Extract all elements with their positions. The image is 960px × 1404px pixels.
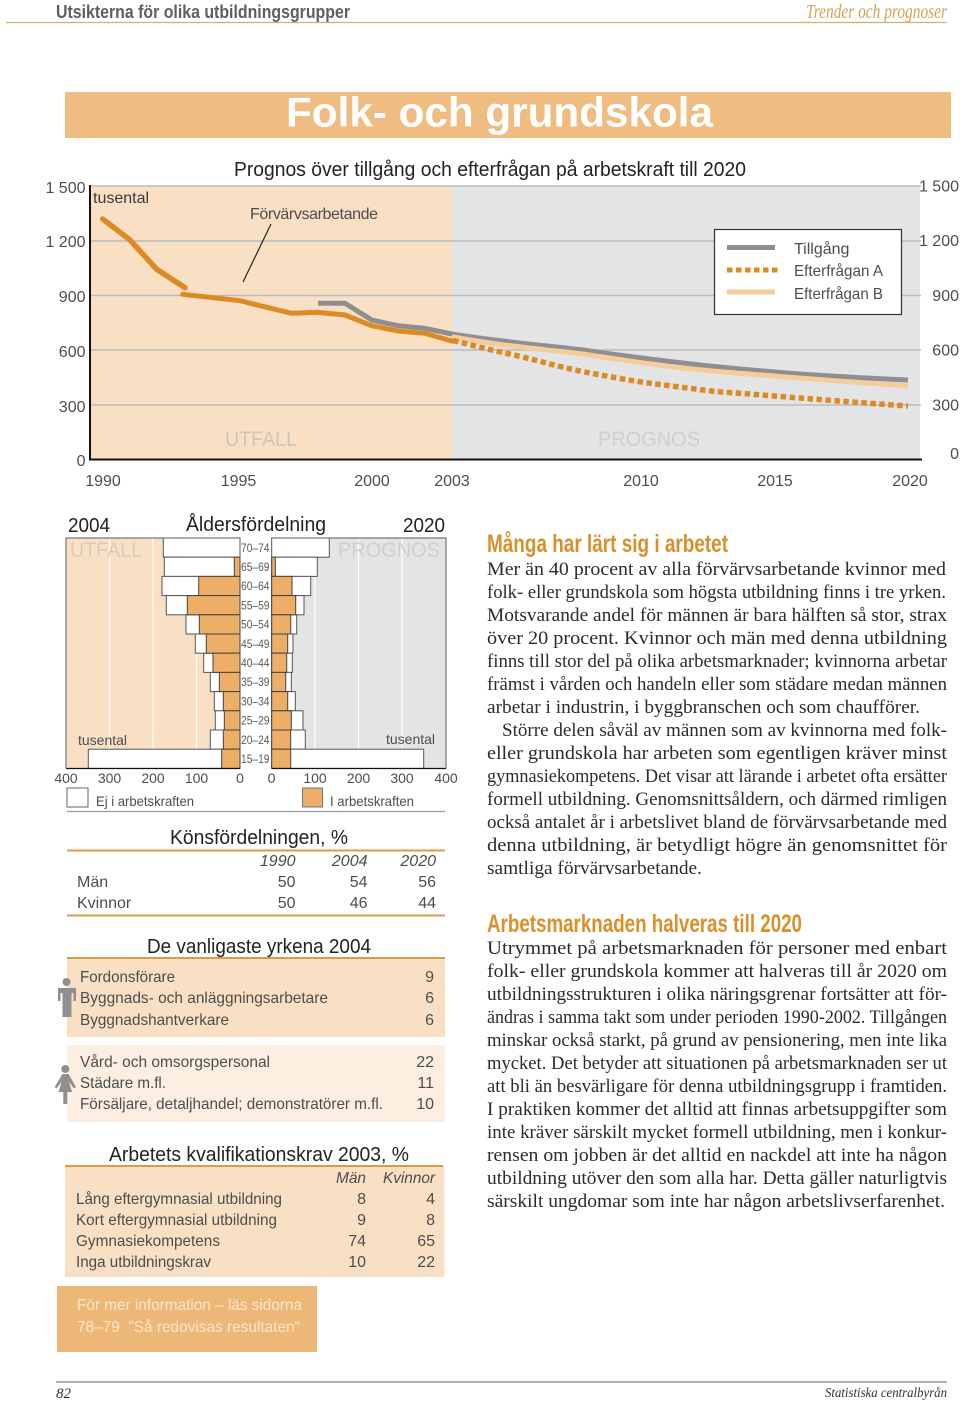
age group labels: 45–49 xyxy=(241,637,270,651)
pyramid axis labels: 0 xyxy=(268,770,276,786)
panel: women's occupations: Vård- och omsorgspersonal xyxy=(80,1053,270,1071)
table: arbetets kvalifikationskrav: 65 xyxy=(417,1233,435,1250)
text block: många har lärt sig i arbetet: arbetar i industrin, i byggbranschen och som chaufförer. xyxy=(487,697,920,718)
table: könsfördelningen: Kvinnor xyxy=(77,895,132,912)
table: arbetets kvalifikationskrav: 22 xyxy=(417,1254,435,1271)
text block: arbetsmarknaden halveras till 2020: folk- eller grundskola kommer att halveras till år 2020 om xyxy=(487,961,947,982)
left axis labels: 600 xyxy=(59,344,86,361)
panel: de vanligaste yrkena xyxy=(55,936,445,1122)
unit labels xyxy=(78,731,435,748)
table: arbetets kvalifikationskrav: 10 xyxy=(348,1254,366,1271)
panel: men's occupations: Fordonsförare xyxy=(80,969,175,986)
table: könsfördelningen: 2004 xyxy=(331,853,368,870)
x axis labels: 2003 xyxy=(434,473,470,490)
age group labels: 60–64 xyxy=(241,579,270,593)
right axis labels: 300 xyxy=(932,398,959,414)
table: könsfördelningen: Könsfördelningen, % xyxy=(170,827,348,849)
text block: arbetsmarknaden halveras till 2020: rensen om jobben är det alltid en nackdel att inte ha någon xyxy=(487,1145,948,1166)
panel: women's occupations: Försäljare, detaljhandel; demonstratörer m.fl. xyxy=(80,1096,383,1113)
x axis labels: 2000 xyxy=(354,473,390,490)
series: efterfrågan A xyxy=(453,340,908,406)
right axis labels: 600 xyxy=(932,342,959,360)
table: arbetets kvalifikationskrav: Lång eftergymnasial utbildning xyxy=(76,1190,282,1208)
period label prognos: PROGNOS xyxy=(598,427,700,451)
text block: många har lärt sig i arbetet xyxy=(487,530,948,879)
legend: Tillgång xyxy=(794,240,849,258)
left axis labels: 0 xyxy=(77,453,86,470)
x axis labels: 2015 xyxy=(757,473,793,490)
panel: prognos background xyxy=(452,186,920,459)
age group labels: 70–74 xyxy=(241,541,270,555)
left axis labels: 1 200 xyxy=(45,234,86,251)
pyramid legend: I arbetskraften xyxy=(330,793,414,809)
series label förvärvsarbetande xyxy=(243,206,378,282)
period labels: UTFALL xyxy=(70,538,142,562)
panel: men's occupations: 9 xyxy=(425,969,434,986)
legend xyxy=(714,230,902,314)
bars: in labour force 2004 xyxy=(187,557,240,768)
heading: Många har lärt sig i arbetet xyxy=(487,530,729,558)
title banner: Folk- och grundskola xyxy=(286,88,714,136)
x axis labels: 1990 xyxy=(85,473,121,490)
period labels xyxy=(70,538,440,562)
table: könsfördelningen: 50 xyxy=(278,874,296,891)
pyramid axis labels: 400 xyxy=(434,770,458,786)
pyramid headings xyxy=(68,513,445,537)
legend: Efterfrågan A xyxy=(794,262,883,280)
series: efterfrågan B xyxy=(452,337,908,386)
age group labels: 25–29 xyxy=(241,714,270,728)
table: könsfördelningen xyxy=(67,827,445,916)
table: arbetets kvalifikationskrav: Kort eftergymnasial utbildning xyxy=(76,1212,277,1229)
panel: men's occupations xyxy=(67,958,445,1037)
panel: women's occupations: 11 xyxy=(417,1075,434,1092)
icon: woman xyxy=(55,1065,76,1104)
text block: många har lärt sig i arbetet: Motsvarande andel för männen är bara hälften så stor, strax xyxy=(487,605,948,626)
pyramid headings: 2020 xyxy=(403,515,445,537)
pyramid axis labels: 300 xyxy=(98,770,121,786)
age group labels: 40–44 xyxy=(241,656,270,670)
table: arbetets kvalifikationskrav: Män xyxy=(336,1170,366,1187)
table: arbetets kvalifikationskrav: Arbetets kvalifikationskrav 2003, % xyxy=(109,1144,409,1166)
right axis labels: 0 xyxy=(950,446,959,463)
panel: men's occupations: Byggnads- och anläggningsarbetare xyxy=(80,990,328,1007)
unit labels: tusental xyxy=(386,731,435,747)
pyramid axis labels: 100 xyxy=(303,770,327,786)
unit labels: tusental xyxy=(78,732,127,748)
table: arbetets kvalifikationskrav: 74 xyxy=(348,1233,366,1250)
table: arbetets kvalifikationskrav: 4 xyxy=(426,1191,435,1208)
heading: Arbetsmarknaden halveras till 2020 xyxy=(487,910,802,938)
table: könsfördelningen: 50 xyxy=(278,895,296,912)
left axis labels: 300 xyxy=(59,399,86,416)
table: arbetets kvalifikationskrav: Inga utbildningskrav xyxy=(76,1254,211,1271)
text block: arbetsmarknaden halveras till 2020: att bli än besvärligare för denna utbildningsgrupp i framtiden. xyxy=(487,1076,947,1097)
table: arbetets kvalifikationskrav: 9 xyxy=(357,1212,366,1229)
callout: more information: För mer information – läs sidorna xyxy=(77,1297,302,1314)
page footer xyxy=(56,1382,947,1402)
text block: många har lärt sig i arbetet: samtliga förvärvsarbetande. xyxy=(487,858,702,879)
panel: men's occupations: 6 xyxy=(425,990,434,1007)
panel: 2004 background xyxy=(66,538,240,768)
series label förvärvsarbetande: Förvärvsarbetande xyxy=(250,206,378,223)
callout: more information: 78–79 "Så redovisas resultaten" xyxy=(77,1318,300,1336)
age group labels xyxy=(241,541,270,766)
panel: de vanligaste yrkena: De vanligaste yrkena 2004 xyxy=(147,936,371,958)
left axis labels xyxy=(45,180,86,470)
table: könsfördelningen: 44 xyxy=(418,895,436,912)
age group labels: 20–24 xyxy=(241,733,270,747)
x axis labels xyxy=(85,473,928,490)
text block: arbetsmarknaden halveras till 2020: mycket. Det betyder att situationen på arbetsmarknaden ser ut xyxy=(487,1053,948,1074)
chart heading: Prognos över tillgång och efterfrågan på arbetskraft till 2020 xyxy=(234,158,746,181)
panel: women's occupations xyxy=(67,1045,445,1122)
table: arbetets kvalifikationskrav: Gymnasiekompetens xyxy=(76,1233,220,1250)
page footer: 82 xyxy=(56,1386,72,1402)
panel: women's occupations: 10 xyxy=(416,1096,434,1113)
callout: more information xyxy=(57,1286,317,1352)
age group labels: 50–54 xyxy=(241,618,270,632)
table: arbetets kvalifikationskrav: Kvinnor xyxy=(383,1170,436,1187)
series: tillgång xyxy=(318,303,908,380)
text block: arbetsmarknaden halveras till 2020: I praktiken kommer det alltid att finnas arbetsuppgifter som xyxy=(487,1099,947,1120)
table: könsfördelningen: 2020 xyxy=(399,853,436,870)
period label utfall: UTFALL xyxy=(225,427,297,451)
left axis labels: 1 500 xyxy=(45,180,86,197)
age group labels: 30–34 xyxy=(241,694,270,708)
pyramid axis labels: 300 xyxy=(390,770,414,786)
series: förvärvsarbetande 1993-2003 xyxy=(183,294,452,341)
text block: många har lärt sig i arbetet: finns till stor del på olika arbetsmarknader; kvinnorna arbetar xyxy=(487,651,948,672)
icon: man xyxy=(58,978,76,1017)
text block: arbetsmarknaden halveras till 2020: utbildningsstrukturen i olika näringsgrenar fortsätter att för- xyxy=(487,984,947,1005)
table: könsfördelningen: 46 xyxy=(350,895,368,912)
text block: många har lärt sig i arbetet: också antalet år i arbetslivet bland de förvärvsarbetande med xyxy=(487,812,947,833)
period labels: PROGNOS xyxy=(338,538,440,562)
age group labels: 35–39 xyxy=(241,675,270,689)
text block: många har lärt sig i arbetet: denna utbildning, är betydligt högre än genomsnittet för xyxy=(487,835,948,856)
text block: arbetsmarknaden halveras till 2020: Utrymmet på arbetsmarknaden för personer med enbart xyxy=(487,938,948,959)
table: arbetets kvalifikationskrav: 8 xyxy=(426,1212,435,1229)
legend: Efterfrågan B xyxy=(794,285,883,303)
x axis labels: 1995 xyxy=(221,473,256,490)
text block: många har lärt sig i arbetet: formell utbildning. Genomsnittsåldern, och därmed rimligen xyxy=(487,789,947,810)
population pyramid: åldersfördelning xyxy=(54,513,458,812)
panel: women's occupations: 22 xyxy=(416,1054,434,1071)
text block: arbetsmarknaden halveras till 2020: minskar också starkt, på grund av pensionering, men inte lika xyxy=(487,1030,948,1051)
x axis labels: 2010 xyxy=(623,473,659,490)
pyramid axis labels xyxy=(54,770,458,786)
text block: många har lärt sig i arbetet: gymnasiekompetens. Det visar att lärande i arbetet ofta ersätter xyxy=(487,766,948,787)
unit label: tusental xyxy=(93,190,149,207)
page footer: Statistiska centralbyrån xyxy=(825,1386,947,1401)
bars: not in labour force 2020 xyxy=(272,538,424,768)
bars: not in labour force 2004 xyxy=(88,538,240,768)
panel: men's occupations: Byggnadshantverkare xyxy=(80,1012,229,1029)
age group labels: 15–19 xyxy=(241,752,270,766)
text block: arbetsmarknaden halveras till 2020: inte kräver särskilt mycket formell utbildning, men i konkur- xyxy=(487,1122,947,1143)
text block: arbetsmarknaden halveras till 2020: särskilt ungdomar som inte har någon arbetslivserfarenhet. xyxy=(487,1191,945,1212)
table: könsfördelningen: Män xyxy=(77,874,108,891)
right axis labels xyxy=(919,178,959,463)
age group labels: 55–59 xyxy=(241,598,270,612)
table: könsfördelningen: 1990 xyxy=(260,853,296,870)
text block: många har lärt sig i arbetet: främst i vården och handeln eller som städare medan männen xyxy=(487,674,947,695)
text block: arbetsmarknaden halveras till 2020: utbildning utöver den som alla har. Detta gäller naturligtvis xyxy=(487,1168,947,1189)
page header: Utsikterna för olika utbildningsgrupper xyxy=(56,1,350,22)
series: förvärvsarbetande 1990-1993 xyxy=(103,219,185,288)
right axis labels: 900 xyxy=(932,288,959,305)
text block: många har lärt sig i arbetet: Mer än 40 procent av alla förvärvsarbetande kvinnor med xyxy=(487,559,947,580)
pyramid axis labels: 200 xyxy=(347,770,370,786)
panel: 2020 background xyxy=(272,538,446,768)
pyramid axis labels: 0 xyxy=(236,770,244,786)
pyramid axis labels: 400 xyxy=(54,770,78,786)
pyramid legend xyxy=(67,788,445,812)
table: arbetets kvalifikationskrav: 8 xyxy=(357,1191,366,1208)
age group labels: 65–69 xyxy=(241,560,270,574)
text block: många har lärt sig i arbetet: eller grundskola har arbeten som egentligen kräver minst xyxy=(487,743,948,764)
text block: arbetsmarknaden halveras till 2020 xyxy=(487,910,948,1212)
x axis labels: 2020 xyxy=(892,473,928,490)
panel: men's occupations: 6 xyxy=(425,1012,434,1029)
panel: utfall background xyxy=(91,186,452,459)
pyramid legend: Ej i arbetskraften xyxy=(96,793,194,809)
table: könsfördelningen: 54 xyxy=(350,874,368,891)
right axis labels: 1 500 xyxy=(919,178,959,196)
pyramid headings: Åldersfördelning xyxy=(186,513,326,536)
line chart: supply and demand forecast xyxy=(45,158,959,490)
text block: många har lärt sig i arbetet: över 20 procent. Kvinnor och män med denna utbildning xyxy=(487,628,948,649)
title banner xyxy=(65,88,951,138)
right axis labels: 1 200 xyxy=(919,233,959,250)
page header xyxy=(6,1,947,23)
text block: många har lärt sig i arbetet: folk- eller grundskola som högsta utbildning finns i tre yrken. xyxy=(487,582,946,603)
left axis labels: 900 xyxy=(59,289,86,306)
table: arbetets kvalifikationskrav xyxy=(65,1144,444,1277)
table: könsfördelningen: 56 xyxy=(418,874,436,891)
text block: arbetsmarknaden halveras till 2020: ändras i samma takt som under perioden 1990-2002. Tillgången xyxy=(487,1007,947,1028)
text block: många har lärt sig i arbetet: Större delen såväl av männen som av kvinnorna med folk- xyxy=(502,720,947,741)
pyramid headings: 2004 xyxy=(68,515,110,537)
pyramid axis labels: 100 xyxy=(185,770,208,786)
bars: in labour force 2020 xyxy=(272,557,296,768)
pyramid axis labels: 200 xyxy=(141,770,165,786)
panel: women's occupations: Städare m.fl. xyxy=(80,1075,166,1092)
